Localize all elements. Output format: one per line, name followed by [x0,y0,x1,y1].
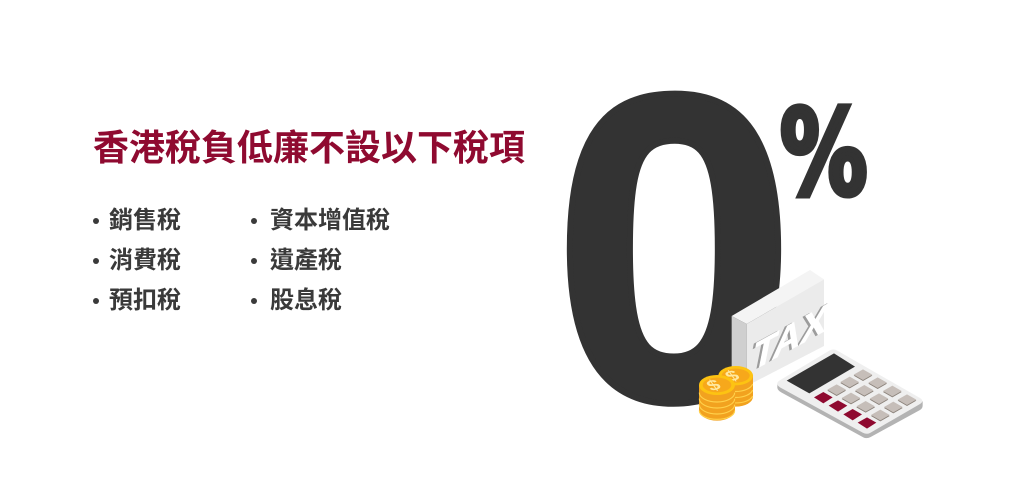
calculator keys [814,369,916,429]
icon: front coin stack: $ [702,375,725,394]
list: right column of taxes: 股息稅 [270,287,342,314]
list: left column of taxes [93,207,181,314]
icon: calculator [777,349,923,438]
list: right column of taxes [251,207,390,314]
icon: tax block: TAX [746,294,830,382]
list: left column of taxes: 預扣稅 [109,287,181,314]
illustration: tax block, coins, calculator [699,270,923,438]
list: right column of taxes: 遺產稅 [270,247,342,274]
big zero numeral: 0 [552,2,796,492]
list: left column of taxes: 消費稅 [109,247,181,274]
icon: tax block: TAX [748,293,832,381]
icon: tax block [732,270,832,386]
list: right column of taxes: 資本增值稅 [270,207,390,234]
icon: front coin stack [699,375,735,421]
calculator screen [787,353,855,393]
list: left column of taxes: 銷售稅 [109,207,181,234]
percent sign: % [780,86,867,222]
title: 香港稅負低廉不設以下稅項 [93,127,525,168]
icon: back coin stack: $ [721,366,744,385]
icon: back coin stack [718,366,753,407]
